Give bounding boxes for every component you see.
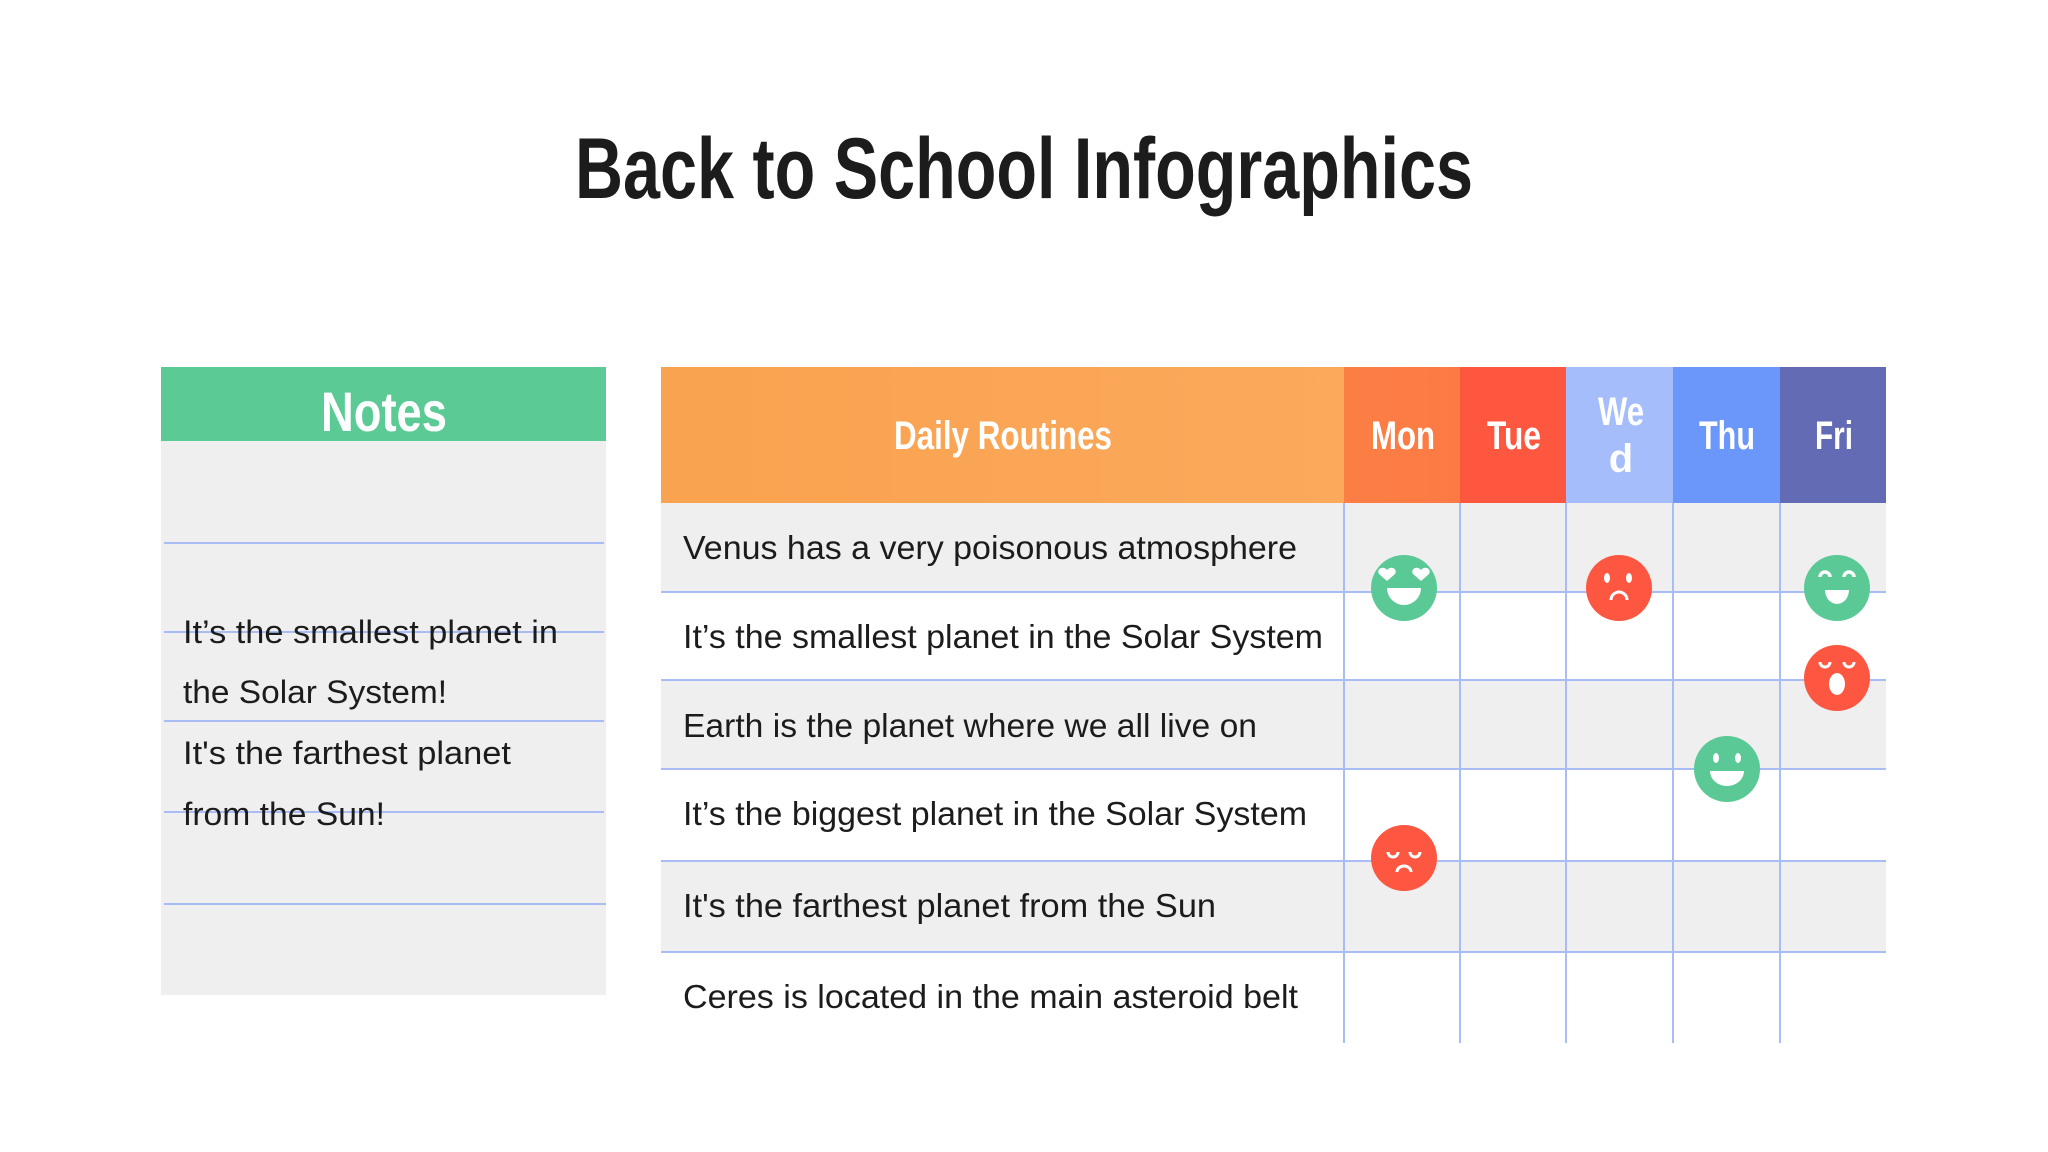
row labels: Venus has a very poisonous atmosphere [683,529,1297,566]
header row: Tue [1487,414,1541,458]
icon: unhappy face Mon [1371,825,1437,891]
row labels: It’s the biggest planet in the Solar System [683,795,1307,832]
notes text [183,614,558,832]
row labels: Earth is the planet where we all live on [683,707,1257,744]
header row [661,367,1886,503]
notes text: the Solar System! [183,674,447,710]
header row: d [1609,437,1633,481]
row labels [683,529,1323,1015]
row backgrounds [661,503,1886,1043]
panel: notes [161,367,606,995]
header row: Mon [1371,414,1435,458]
table: daily routines [661,367,1886,1043]
icon: heart-eyes face Mon [1371,555,1437,621]
header row: We [1598,390,1644,434]
notes header [161,367,606,443]
row labels: Ceres is located in the main asteroid belt [683,978,1298,1015]
notes text: It's the farthest planet [183,735,511,771]
notes text: It’s the smallest planet in [183,614,558,650]
row labels: It’s the smallest planet in the Solar System [683,618,1323,655]
title: Back to School Infographics [575,121,1473,217]
notes text: from the Sun! [183,796,385,832]
header row: Thu [1699,414,1755,458]
icon: happy face Fri [1804,555,1870,621]
icon: smiling face Thu [1694,736,1760,802]
icon: yawning face Fri [1804,645,1870,711]
header row: Daily Routines [894,414,1112,458]
row labels: It's the farthest planet from the Sun [683,887,1216,924]
icon: sad face Wed [1586,555,1652,621]
header row: Fri [1815,414,1853,458]
notes header: Notes [321,380,447,443]
